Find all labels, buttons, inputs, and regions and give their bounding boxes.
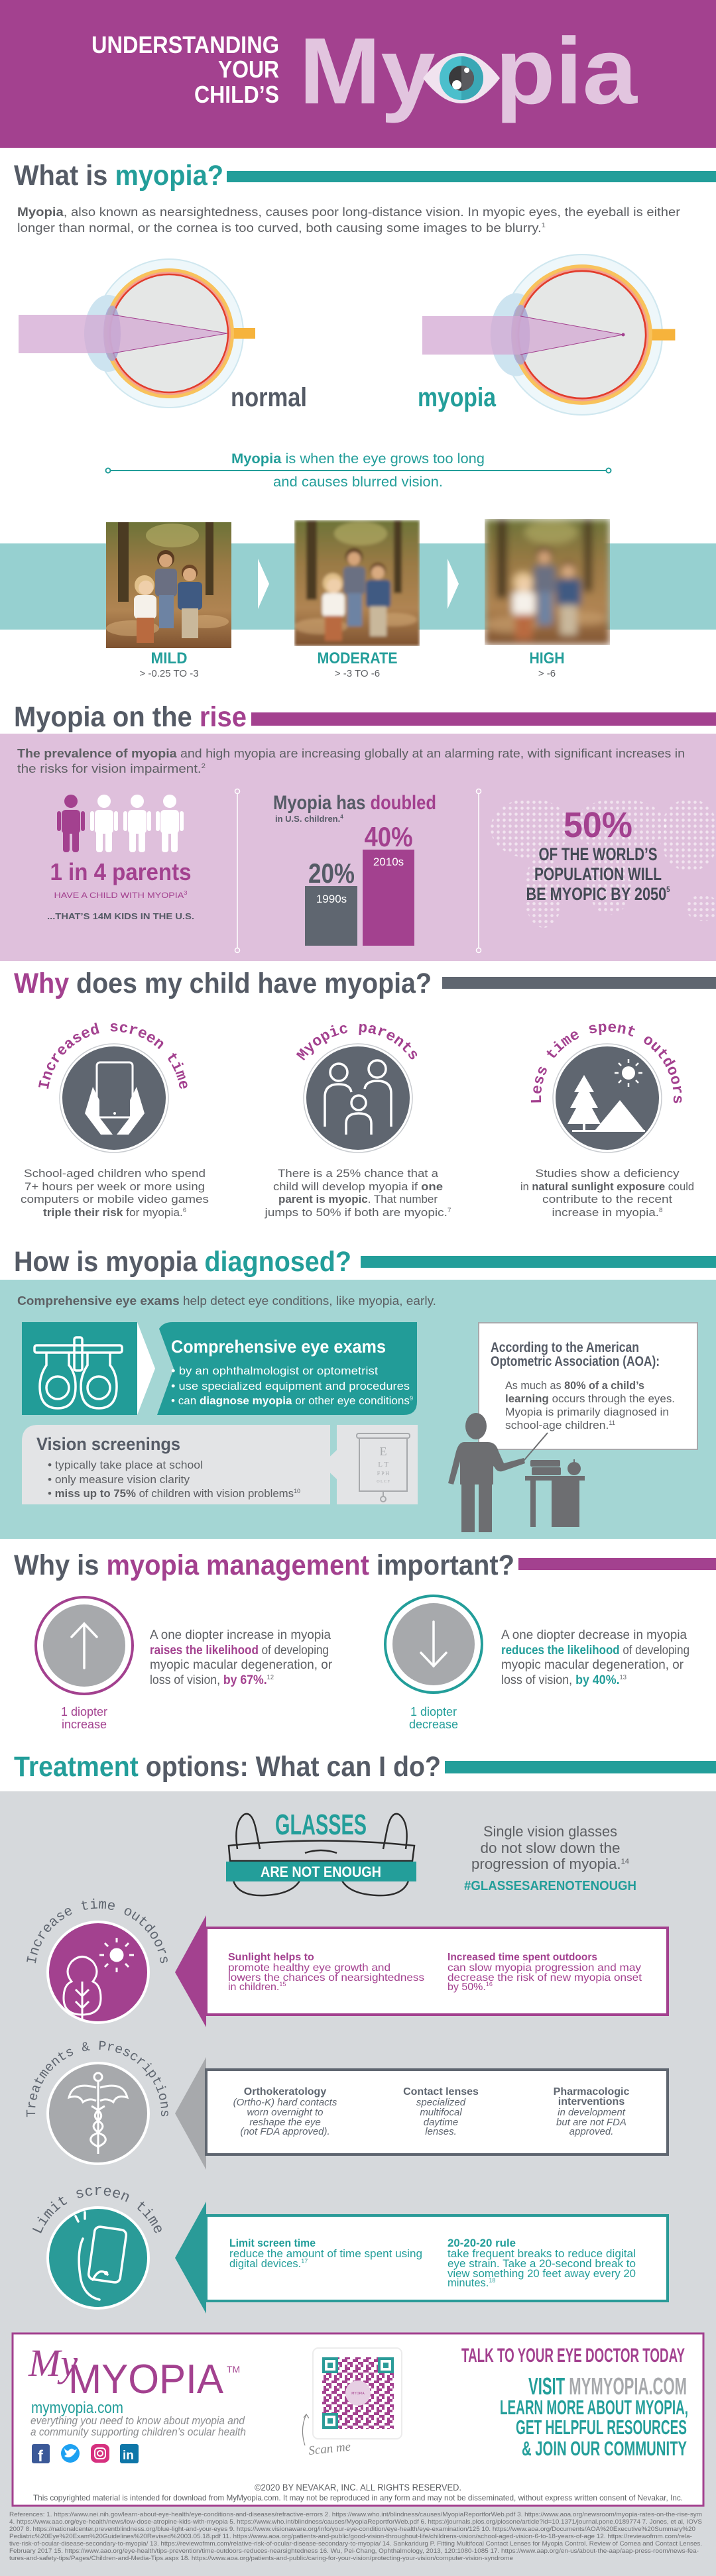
text: outdoors <box>520 1167 694 1219</box>
stat: diopter increase <box>36 1597 333 1731</box>
diagram: myopic eye <box>422 254 675 415</box>
option: treatments and prescriptions: reshape the eye <box>249 2117 321 2128</box>
references: 4. https://www.aao.org/eye-health/news/low-dose-atropine-kids-with-myopia 5. https://www.who.int/blindness/causes/MyopiaReportforWeb.pdf 6. https://journals.plos.org/plosone/article?id=10.1371/journal.pone.0189774 7. Jones, et al, IOVS <box>9 2518 702 2526</box>
text: outdoors: 8 <box>659 1207 663 1213</box>
stat: 50% of world: 50% <box>564 805 632 845</box>
copyright: ©2020 BY NEVAKAR, INC. ALL RIGHTS RESERVED. <box>255 2482 461 2492</box>
text: parents: 7 <box>448 1207 451 1213</box>
stat: diopter decrease: 13 <box>620 1674 626 1681</box>
severity labels: > -6 <box>538 668 556 679</box>
text: single vision glasses: Single vision glasses <box>483 1823 617 1840</box>
stat: 50% of world: 5 <box>666 885 670 894</box>
option: treatments and prescriptions: lenses. <box>425 2126 457 2137</box>
text: website: everything you need to know about myopia and <box>30 2414 245 2427</box>
panel: treatment options <box>0 1791 716 2576</box>
label: normal: normal <box>231 383 307 412</box>
option: treatments and prescriptions: worn overnight to <box>247 2107 324 2118</box>
box: comprehensive eye exams: • can diagnose myopia or other eye conditions <box>171 1394 409 1407</box>
icon: eye chart <box>322 1425 418 1504</box>
heading: Why does my child have myopia <box>14 968 716 999</box>
stat: diopter decrease: myopic macular degeneration, or <box>501 1658 684 1672</box>
logo: MyMyopia: TM <box>227 2364 240 2375</box>
callout: AOA: school-age children. <box>505 1419 606 1431</box>
stat: diopter increase: myopic macular degeneration, or <box>150 1658 333 1672</box>
option: treatments and prescriptions: approved. <box>569 2126 613 2137</box>
stat: diopter decrease: A one diopter decrease in myopia <box>501 1628 687 1642</box>
icon: teacher <box>448 1413 585 1532</box>
text: website <box>30 2399 246 2438</box>
icons: social: in <box>123 2449 134 2463</box>
heading: Myopia on the rise: Myopia on the rise <box>14 701 247 733</box>
icon: glasses are not enough: ARE NOT ENOUGH <box>261 1864 381 1880</box>
callout: eye grows too long: Myopia is when the eye grows too long <box>231 451 485 467</box>
text: prevalence: 2 <box>202 763 206 770</box>
box: comprehensive eye exams <box>157 1322 417 1415</box>
severity labels: > -3 TO -6 <box>335 668 380 679</box>
box: comprehensive eye exams: Comprehensive eye exams <box>171 1337 386 1357</box>
references: References: 1. https://www.nei.nih.gov/learn-about-eye-health/eye-conditions-and-diseases/refractive-errors 2. https://www.who.int/blindness/causes/MyopiaReportforWeb.pdf 3. https://www.aoa.org/newsroom/myopia-rates-on-the-rise-sym <box>9 2511 702 2518</box>
photo: moderate <box>294 520 420 646</box>
icon: eye chart: O L C F <box>377 1480 390 1484</box>
option: treatments and prescriptions: Orthokeratology <box>244 2086 326 2098</box>
box: comprehensive eye exams: • by an ophthalmologist or optometrist <box>171 1365 378 1377</box>
option: treatments and prescriptions: (Ortho-K) hard contacts <box>233 2097 337 2108</box>
stat: diopter increase: loss of vision, by 67%. <box>150 1673 270 1687</box>
arrow <box>258 559 269 609</box>
text: screen time: 7+ hours per week or more using <box>25 1180 205 1193</box>
logo: MyMyopia <box>28 2341 240 2402</box>
option: limit screen time: reduce the amount of time spent using <box>229 2248 422 2260</box>
icon: family <box>325 1060 391 1135</box>
cause: less time outdoors: Less time spent outdoors <box>530 1023 682 1103</box>
option: treatments and prescriptions: Contact lenses <box>403 2086 479 2098</box>
stat: 50% of world <box>526 805 670 904</box>
copyright: This copyrighted material is intended for download from MyMyopia.com. It may not be reproduced in any form and may not be disseminated, without express written consent of Nevakar, Inc. <box>33 2493 683 2502</box>
panel: myopia severity photos <box>0 519 716 648</box>
text: outdoors: Studies show a deficiency <box>536 1167 680 1180</box>
icons: social: f <box>38 2447 44 2465</box>
QR code: MYOPIA <box>351 2392 365 2396</box>
text: prevalence: The prevalence of myopia and high myopia are increasing globally at an alarming rate, with significant increases in <box>17 747 685 760</box>
diagram: normal eye <box>19 259 255 408</box>
box: comprehensive eye exams: • use specialized equipment and procedures <box>171 1380 410 1392</box>
arrow <box>448 559 459 609</box>
text: screen time: computers or mobile video games <box>21 1193 209 1205</box>
stat: 1 in 4 parents <box>47 858 194 921</box>
callout: eye grows too long <box>106 451 611 490</box>
option: limit screen time: minutes. <box>448 2277 489 2289</box>
heading: What is myopia <box>14 160 716 192</box>
option: limit screen time: 20-20-20 rule <box>448 2237 516 2249</box>
option: increase time outdoors <box>27 1898 669 2027</box>
QR code <box>313 2348 402 2439</box>
text: single vision glasses: 14 <box>621 1858 629 1866</box>
label: myopia: myopia <box>418 383 497 412</box>
stat: diopter increase: 1 diopter <box>61 1705 107 1718</box>
box: vision screenings: 10 <box>294 1488 300 1494</box>
text: single vision glasses: #GLASSESARENOTENOUGH <box>464 1879 636 1893</box>
option: increase time outdoors: 16 <box>486 1981 493 1988</box>
stat: diopter increase: A one diopter increase in myopia <box>150 1628 331 1642</box>
option: increase time outdoors: Increased time spent outdoors <box>448 1952 597 1963</box>
stat: diopter decrease: decrease <box>409 1718 458 1731</box>
stat: 50% of world: OF THE WORLD’S <box>538 844 658 864</box>
option: treatments and prescriptions: interventions <box>558 2096 625 2107</box>
box: vision screenings: Vision screenings <box>36 1434 180 1454</box>
header title Myopia: Myopia <box>299 19 638 124</box>
bar chart: myopia doubled <box>273 792 436 946</box>
severity labels: MILD <box>151 649 187 667</box>
stat: 1 in 4 parents: ...THAT’S 14M KIDS IN THE U.S. <box>47 911 194 921</box>
header subtitle: CHILD’S <box>194 81 279 108</box>
bar chart: myopia doubled: 2010s <box>373 856 404 868</box>
heading: Why is myopia management important: Why is myopia management important? <box>14 1549 514 1581</box>
text: screen time: School-aged children who spend <box>24 1167 206 1180</box>
box: vision screenings: • typically take place at school <box>48 1459 203 1471</box>
stat: diopter decrease: reduces the likelihood of developing <box>501 1644 689 1657</box>
cause: less time outdoors <box>520 1023 694 1219</box>
text: website: a community supporting children’s ocular health <box>30 2426 246 2438</box>
heading: How is myopia diagnosed <box>14 1246 716 1278</box>
bar chart: myopia doubled: Myopia has doubled <box>273 792 436 814</box>
heading: Why does my child have myopia: Why does my child have myopia? <box>14 968 432 999</box>
icon: people <box>57 795 184 852</box>
panel: diagnosis <box>0 1280 716 1539</box>
bar chart: myopia doubled: 20% <box>308 858 355 889</box>
callout: eye grows too long: and causes blurred vision. <box>273 475 443 490</box>
option: treatments and prescriptions: daytime <box>424 2117 458 2128</box>
scan me <box>302 2414 351 2458</box>
text: outdoors: in natural sunlight exposure could <box>520 1180 694 1193</box>
stat: 1 in 4 parents: HAVE A CHILD WITH MYOPIA <box>54 891 164 900</box>
text: parents: There is a 25% chance that a <box>278 1167 439 1180</box>
box: comprehensive eye exams: 9 <box>410 1395 413 1402</box>
bar chart: myopia doubled: 1990s <box>316 893 347 905</box>
icon: eye chart: L T <box>378 1461 388 1469</box>
text: screen time: 6 <box>183 1207 186 1213</box>
severity labels: MODERATE <box>317 649 398 667</box>
header banner <box>0 0 716 148</box>
option: limit screen time: take frequent breaks to reduce digital <box>448 2248 636 2260</box>
option: increase time outdoors: in children. <box>228 1982 279 1993</box>
stat: 50% of world: BE MYOPIC BY 2050 <box>526 884 701 904</box>
text: myopia definition: longer than normal, or the cornea is too curved, both causing some images to be blurry. <box>17 221 479 235</box>
icon: eye <box>423 53 500 103</box>
text: screen time <box>21 1167 209 1219</box>
heading: Myopia on the rise <box>14 701 716 733</box>
severity labels: > -0.25 TO -3 <box>139 668 199 679</box>
stat: 1 in 4 parents: 3 <box>184 890 188 896</box>
photo: mild <box>106 522 231 648</box>
stat: diopter increase: 12 <box>267 1674 274 1681</box>
option: limit screen time: 18 <box>489 2277 495 2284</box>
heading: What is myopia: What is myopia? <box>14 160 223 192</box>
bar chart: myopia doubled: 40% <box>365 821 412 852</box>
scan me: Scan me <box>308 2439 351 2458</box>
callout: AOA: Optometric Association (AOA): <box>491 1354 660 1369</box>
header subtitle <box>91 31 279 108</box>
header subtitle: UNDERSTANDING <box>91 31 279 58</box>
option: treatments and prescriptions: specialized <box>416 2097 466 2108</box>
stat: diopter decrease: loss of vision, by 40%. <box>501 1673 623 1687</box>
option: treatments and prescriptions: (not FDA approved). <box>240 2126 330 2137</box>
text: parents: jumps to 50% if both are myopic. <box>265 1206 428 1219</box>
callout: AOA: According to the American <box>491 1340 639 1355</box>
call to action <box>461 2345 688 2460</box>
photo: high <box>485 519 610 645</box>
stat: 1 in 4 parents: 1 in 4 parents <box>50 858 191 885</box>
option: increase time outdoors: Increase time outdoors <box>27 1898 168 1963</box>
option: increase time outdoors: can slow myopia progression and may <box>448 1962 641 1974</box>
references: February 2017 15. https://www.aao.org/eye-health/tips-prevention/time-outdoors-reduces-nearsightedness 16. Wu, Pei-Chang, Ophthalmology, 2013, 120:1080-1085 17. https://www.aap.org/en-us/about-the-aap/aap-press-room/news-fea- <box>9 2548 699 2555</box>
stat: diopter decrease: 1 diopter <box>410 1705 457 1718</box>
stat: diopter increase: raises the likelihood of developing <box>150 1644 329 1657</box>
references: tures-and-safety-tips/Pages/Children-and-Media-Tips.aspx 18. https://www.aoa.org/patients-and-public/caring-for-your-vision/protecting-your-vision/computer-vision-syndrome <box>9 2555 513 2562</box>
icon: glasses are not enough: GLASSES <box>275 1809 367 1841</box>
option: limit screen time: Limit screen time <box>32 2187 162 2233</box>
option: increase time outdoors: by 50%. <box>448 1982 486 1993</box>
icon: eye chart: F P H <box>377 1471 389 1477</box>
icon: tablet with hands <box>85 1062 145 1135</box>
callout: AOA: learning occurs through the eyes. <box>505 1392 675 1405</box>
text: parents: child will develop myopia if one <box>273 1180 443 1193</box>
text: intro: Comprehensive eye exams help detect eye conditions, like myopia, early. <box>17 1294 436 1308</box>
option: treatments and prescriptions <box>27 2041 669 2170</box>
references: 2007 8. https://nationalcenter.preventblindness.org/blue-light-and-your-eyes 9. https://www.visionaware.org/info/your-eye-condition/eye-health/eye-examination/125 10. https://www.aoa.org/Documents/AOA%20Executive%20Summary%20 <box>9 2526 695 2533</box>
icon: glasses are not enough <box>226 1809 416 1895</box>
severity labels <box>139 649 565 679</box>
callout: AOA <box>479 1323 697 1449</box>
box: vision screenings: • miss up to 75% of children with vision problems <box>48 1487 296 1500</box>
callout: AOA: As much as 80% of a child’s <box>505 1379 644 1392</box>
text: myopia definition: Myopia , also known as nearsightedness, causes poor long-distance vision. In myopic eyes, the eyeball is either <box>17 205 680 219</box>
icon: eye chart: E <box>379 1445 387 1458</box>
text: single vision glasses <box>464 1823 636 1893</box>
logo: MyMyopia: MYOPIA <box>68 2357 224 2402</box>
text: outdoors: contribute to the recent <box>542 1193 672 1205</box>
option: limit screen time: eye strain. Take a 20-second break to <box>448 2258 636 2270</box>
cause: myopic parents: Myopic parents <box>296 1023 418 1060</box>
option: increase time outdoors: Sunlight helps to <box>228 1952 314 1963</box>
stat: diopter decrease <box>385 1596 689 1731</box>
text: parents: parent is myopic. That number <box>278 1193 438 1205</box>
callout: AOA: Myopia is primarily diagnosed in <box>505 1406 669 1418</box>
copyright <box>33 2482 683 2502</box>
stat: 50% of world: POPULATION WILL <box>534 864 662 884</box>
option: treatments and prescriptions: in development <box>558 2107 626 2118</box>
option: limit screen time: digital devices. <box>229 2258 301 2270</box>
bar chart: myopia doubled: in U.S. children. <box>275 814 340 824</box>
text: parents <box>264 1167 451 1219</box>
icon box: phoropter <box>22 1322 155 1415</box>
references: tive-risk-of-ocular-disease-secondary-to-myopia/ 13. https://reviewofmm.com/relative-risk-of-ocular-disease-secondary-to-myopia/ 14. Sankaridurg P. Fitting Multifocal Contact Lenses for Myopia Control. Review of Cornea and Contact Lenses. <box>9 2540 702 2548</box>
references: Pediatric%20Eye%20Exam%20Guidelines%20Revised%2003.05.18.pdf 11. https://www.aoa.org/patients-and-public/good-vision-throughout-life/childrens-vision/school-aged-vision-6-to-18-years-of-age 12. https://reviewofmm.com/rela- <box>9 2533 692 2540</box>
text: outdoors: increase in myopia. <box>552 1206 649 1219</box>
option: increase time outdoors: promote healthy eye growth and <box>228 1962 390 1974</box>
world map dots <box>491 799 716 928</box>
box: vision screenings: • only measure vision clarity <box>48 1473 190 1486</box>
references <box>9 2511 702 2562</box>
cause: increased screen time <box>21 1023 209 1219</box>
heading: How is myopia diagnosed: How is myopia diagnosed? <box>14 1246 351 1278</box>
box: vision screenings <box>22 1425 330 1504</box>
icons: social <box>32 2444 139 2465</box>
cause: increased screen time: Increased screen time <box>38 1023 188 1089</box>
option: limit screen time: view something 20 feet away every 20 <box>448 2268 636 2280</box>
stat: diopter increase: increase <box>62 1718 107 1731</box>
option: increase time outdoors: decrease the risk of new myopia onset <box>448 1972 642 1984</box>
text: prevalence <box>17 747 685 775</box>
callout: AOA: 11 <box>609 1420 615 1426</box>
option: limit screen time: Limit screen time <box>229 2237 316 2249</box>
icon: tree mountain sun <box>567 1059 645 1132</box>
text: prevalence: the risks for vision impairment. <box>17 762 178 775</box>
option: limit screen time <box>32 2187 669 2314</box>
text: website: mymyopia.com <box>31 2399 123 2417</box>
option: treatments and prescriptions: multifocal <box>420 2107 462 2118</box>
bar chart: myopia doubled: 4 <box>340 814 343 820</box>
heading: Treatment options <box>14 1751 716 1783</box>
footer box <box>13 2333 703 2506</box>
cause: myopic parents <box>265 1023 451 1219</box>
header subtitle: YOUR <box>218 56 279 83</box>
option: treatments and prescriptions: Treatments & Prescriptions <box>27 2041 168 2117</box>
text: myopia definition <box>17 205 680 235</box>
option: treatments and prescriptions: but are not FDA <box>556 2117 626 2128</box>
option: limit screen time: 17 <box>301 2258 308 2265</box>
heading: Treatment options: Treatment options: What can I do? <box>14 1751 441 1783</box>
option: increase time outdoors: lowers the chances of nearsightedness <box>228 1972 424 1984</box>
severity labels: HIGH <box>529 649 565 667</box>
option: increase time outdoors: 15 <box>279 1981 286 1988</box>
panel: myopia on the rise <box>0 734 716 961</box>
text: myopia definition: 1 <box>542 222 546 229</box>
logo: MyMyopia: My <box>28 2341 78 2384</box>
text: single vision glasses: do not slow down the <box>480 1840 621 1856</box>
option: treatments and prescriptions: Pharmacologic <box>554 2086 629 2098</box>
text: screen time: triple their risk for myopia. <box>43 1206 182 1219</box>
text: single vision glasses: progression of myopia. <box>471 1856 619 1872</box>
